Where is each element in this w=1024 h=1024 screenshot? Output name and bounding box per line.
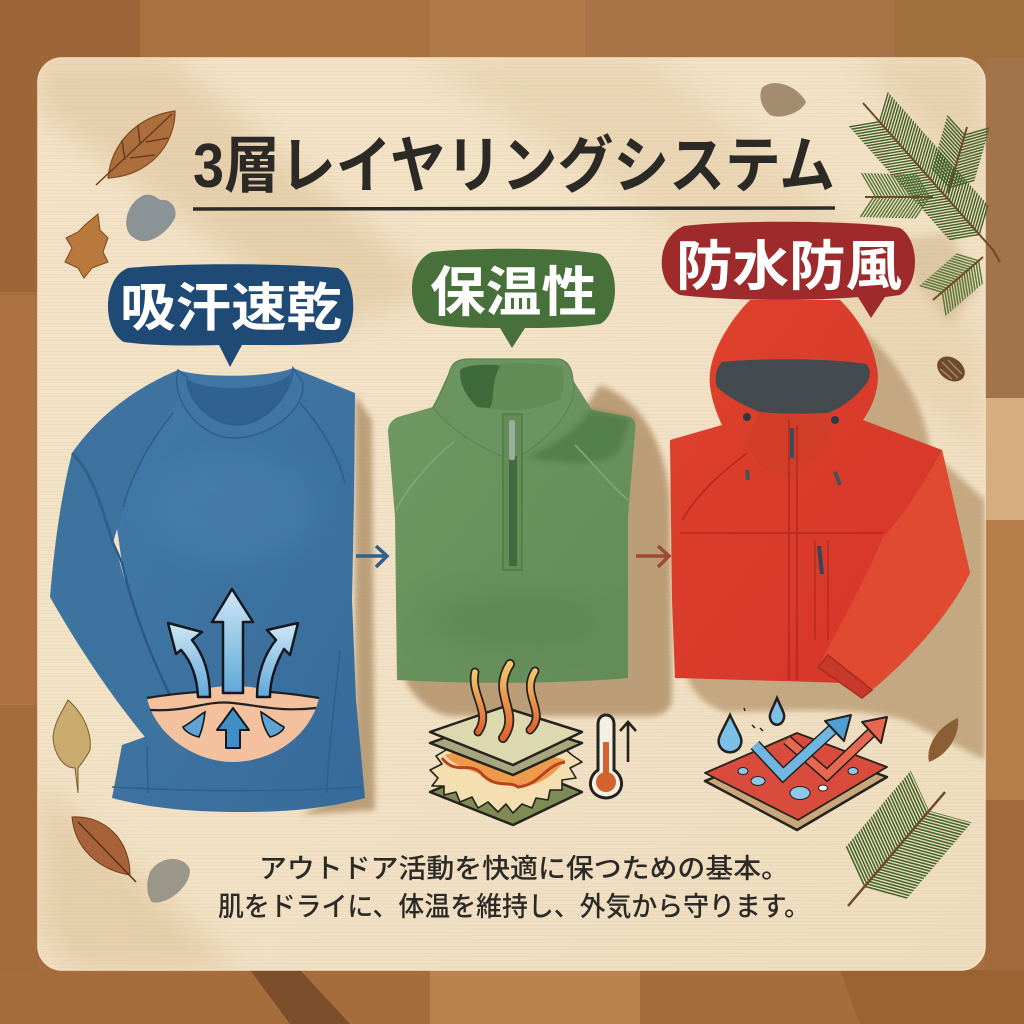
decorative stone bottom left [147, 859, 190, 903]
blue long sleeve shirt [50, 368, 365, 812]
speech bubble: red: 防水防風 [676, 237, 902, 297]
pine cone [932, 351, 970, 387]
panel: mid layer [388, 249, 636, 825]
speech bubble: red [662, 222, 915, 318]
speech bubble: blue: 吸汗速乾 [120, 280, 342, 338]
pine branch top right [863, 103, 1000, 325]
title: 3層レイヤリングシステム [193, 132, 835, 201]
decorative stone top [760, 83, 806, 117]
decorative leaf top left [96, 111, 175, 185]
decorative leaf left [53, 700, 90, 793]
green fleece pullover [388, 359, 635, 683]
red rain jacket [670, 300, 970, 698]
decorative leaf right [928, 718, 958, 762]
waterproof membrane diagram [705, 698, 887, 830]
panel: outer layer [662, 222, 970, 830]
heat layers diagram [430, 664, 582, 825]
speech bubble: blue [108, 264, 353, 367]
caption text: 肌をドライに、体温を維持し、外気から守ります。 [218, 892, 810, 922]
arrow: green to red [636, 546, 669, 567]
decorative leaf bottom left [72, 817, 136, 882]
pine branch bottom right [848, 791, 950, 906]
moisture wicking diagram [147, 589, 319, 762]
caption text: アウトドア活動を快適に保つための基本。 [259, 854, 789, 884]
panel: base layer [50, 264, 365, 812]
caption text [218, 854, 810, 922]
arrow: blue to green [356, 546, 387, 567]
decorative stone [126, 195, 176, 241]
speech bubble: green: 保温性 [430, 263, 597, 323]
icon: thermometer [590, 715, 636, 798]
decorative maple leaf [65, 214, 108, 278]
speech bubble: green [412, 249, 615, 348]
